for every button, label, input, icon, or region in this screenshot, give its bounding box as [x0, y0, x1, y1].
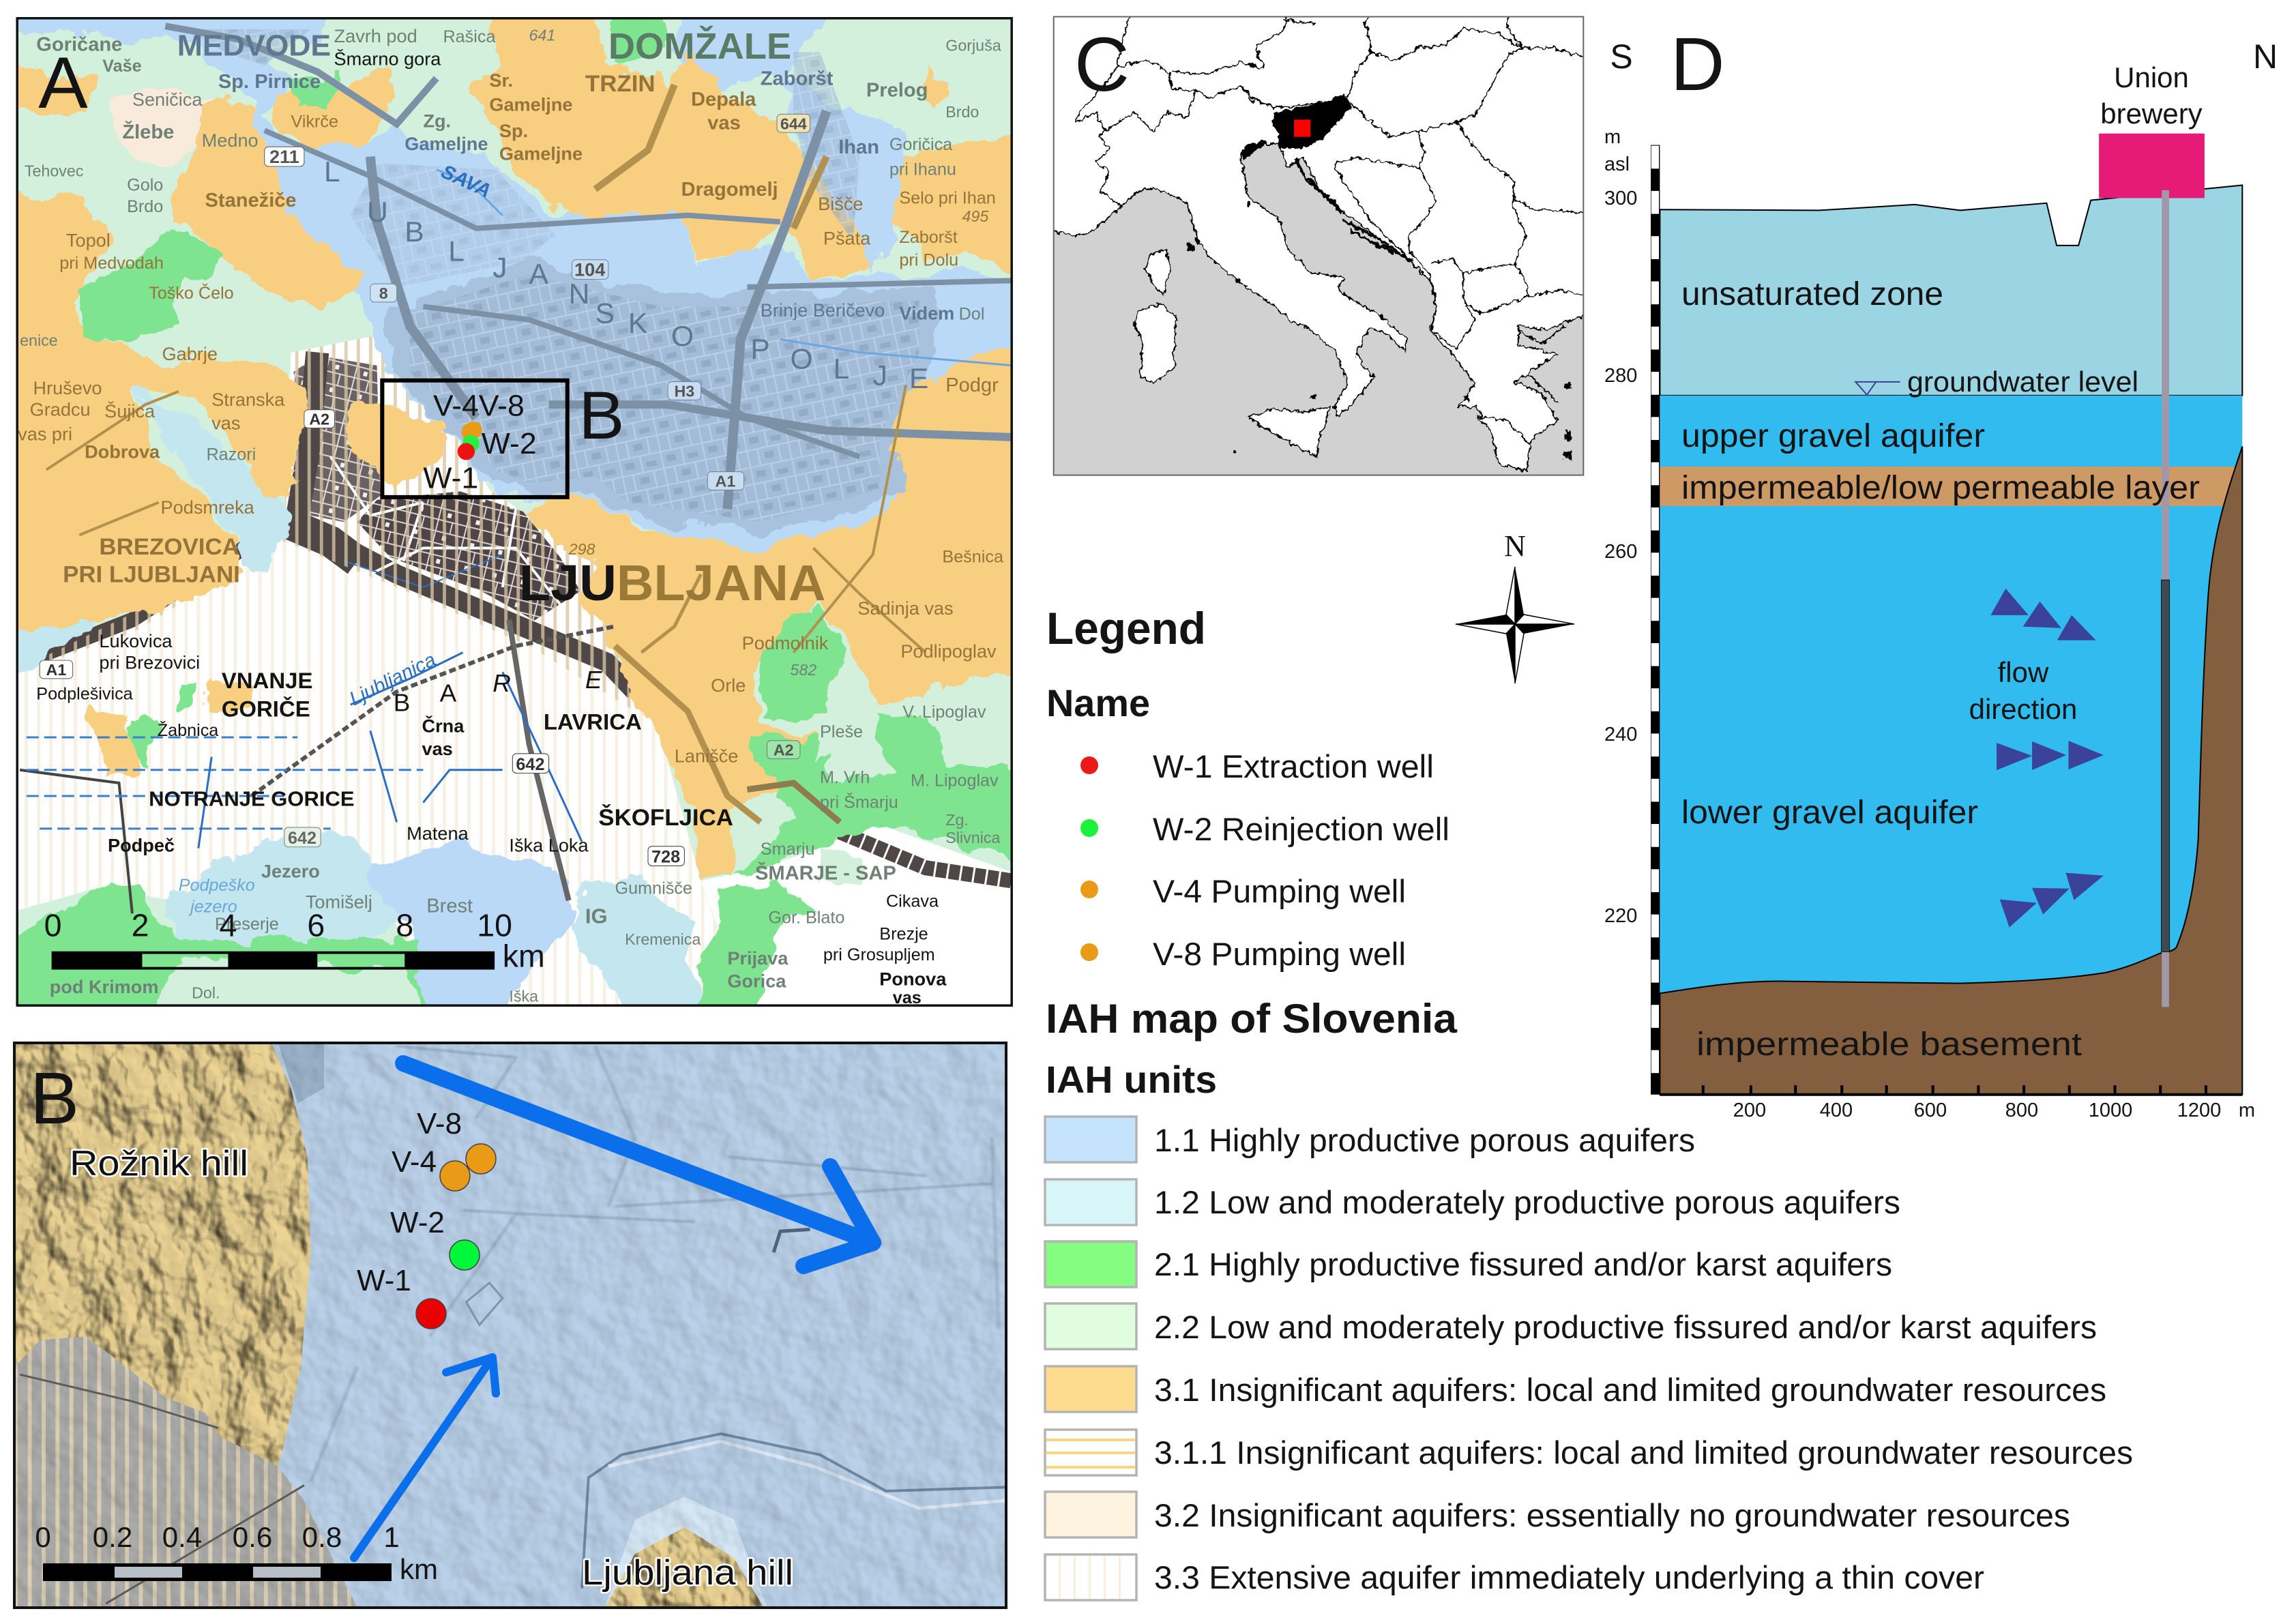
wells on map B: [416, 1144, 496, 1329]
panel A: IAH map: Šmarno gora: [334, 48, 441, 70]
well labels B: V-8: [417, 1107, 462, 1140]
scale bar A: 10: [477, 908, 512, 943]
panel A: IAH map: Lanišče: [675, 746, 738, 766]
panel A: IAH map: 644: [780, 115, 807, 132]
hill labels: Rožnik hill: [70, 1144, 248, 1183]
panel A: IAH map: Zg.: [945, 811, 969, 829]
scale bar B: 1: [383, 1521, 400, 1553]
panel A: IAH map: 642: [288, 829, 317, 848]
panel A: IAH map: pri Šmarju: [820, 792, 898, 812]
legend name heading: Name: [1046, 681, 1150, 724]
panel A: IAH map: O: [671, 320, 694, 352]
panel A: IAH map: Prijava: [727, 948, 789, 969]
panel A: IAH map: TRZIN: [585, 71, 656, 97]
panel A: IAH map: pri Brezovici: [99, 653, 200, 673]
panel A: IAH map: 495: [962, 207, 988, 225]
panel A: IAH map: Slivnica: [945, 829, 1001, 846]
well labels B: V-4: [392, 1145, 437, 1179]
south and north marks: [1610, 38, 2278, 76]
panel A: IAH map: B: [394, 689, 410, 717]
panel A: IAH map: Pleše: [820, 722, 863, 741]
panel A: IAH map: ŠKOFLJICA: [598, 803, 733, 831]
legend heading: Legend: [1046, 603, 1206, 653]
panel A: IAH map: pod Krimom: [50, 977, 158, 997]
panel A: IAH map: PRI LJUBLJANI: [63, 561, 240, 587]
panel A: IAH map: Sr.: [489, 70, 513, 91]
elevation labels: 260: [1604, 541, 1637, 563]
flow direction label: [1969, 656, 2077, 725]
panel A: IAH map: P: [750, 333, 770, 365]
scale bar B: 0.4: [162, 1521, 202, 1553]
panel A: IAH map: Gorica: [727, 971, 786, 991]
distance labels: 400: [1820, 1100, 1853, 1121]
panel A: IAH map: BREZOVICA: [99, 534, 239, 560]
panel A: IAH map: Gabrje: [162, 344, 218, 364]
panel A: IAH map: Vaše: [102, 57, 142, 76]
panel A: IAH map: Golo: [127, 175, 163, 194]
legend: IAH units: 1.2 Low and moderately productive porous aquifers: [1154, 1184, 1900, 1220]
flow direction label: flow: [1998, 656, 2049, 688]
panel A: IAH map: Gor. Blato: [768, 909, 844, 928]
legend: IAH units: 3.1 Insignificant aquifers: local and limited groundwater resources: [1154, 1372, 2106, 1408]
south and north marks: S: [1610, 38, 1633, 76]
elevation labels: asl: [1604, 153, 1630, 175]
panel A: IAH map: Podplešivica: [36, 685, 133, 703]
scale bar B: [35, 1521, 438, 1585]
panel B letter: B: [30, 1057, 79, 1139]
map roads: [20, 26, 1012, 913]
legend: wells: [1080, 748, 1449, 972]
legend: wells: W-2 Reinjection well: [1153, 811, 1449, 847]
legend: IAH units: 3.1.1 Insignificant aquifers: local and limited groundwater resources: [1154, 1434, 2133, 1471]
panel A: IAH map: E: [909, 362, 928, 394]
panel A: IAH map: A1: [716, 473, 735, 490]
legend: IAH units: 2.2 Low and moderately productive fissured and/or karst aquifers: [1154, 1309, 2097, 1345]
panel A: IAH map: Gumnišče: [615, 879, 692, 898]
scale bar B: 0.6: [233, 1521, 272, 1553]
panel A: IAH map: 582: [790, 661, 816, 679]
panel A: IAH map: A2: [309, 411, 329, 428]
panel A: IAH map: Sp.: [499, 121, 528, 141]
panel A: IAH map: Goričane: [36, 34, 122, 56]
panel A: IAH map: Iška: [509, 988, 538, 1005]
flow direction label: direction: [1969, 693, 2077, 725]
distance labels: 1200: [2177, 1100, 2221, 1121]
IAH units heading: IAH units: [1046, 1058, 1217, 1101]
well pipe: [2162, 190, 2169, 1007]
panel A: IAH map: Gameljne: [489, 95, 573, 115]
panel D: cross section: [1604, 23, 2278, 1121]
legend: IAH units: [1045, 1117, 2133, 1600]
impermeable basement: [1660, 447, 2242, 1095]
elevation labels: 280: [1604, 365, 1637, 387]
panel A: IAH map: K: [628, 307, 647, 339]
scale bar B: 0: [35, 1521, 51, 1553]
panel A: IAH map: [0, 7, 1018, 1018]
panel A: IAH map: SAVA: [438, 161, 495, 202]
scale bar A: 4: [219, 908, 237, 943]
panel A: IAH map: LAVRICA: [544, 709, 642, 734]
panel A: IAH map: Podpeč: [108, 836, 175, 855]
panel B frame: [14, 1043, 1006, 1608]
panel A: IAH map: Brdo: [945, 103, 979, 121]
distance labels: 600: [1914, 1100, 1947, 1121]
panel A: IAH map: Žlebe: [122, 120, 174, 143]
elevation scale: [1651, 145, 1660, 1095]
panel A: IAH map: Cikava: [886, 892, 939, 911]
panel A: IAH map: vas pri: [18, 424, 72, 445]
compass rose: [1456, 529, 1574, 683]
panel A: IAH map: 728: [651, 848, 680, 867]
panel A: IAH map: J: [873, 359, 887, 391]
panel A: IAH map: LJUBLJANA: [519, 555, 825, 611]
legend: wells: W-1 Extraction well: [1153, 748, 1434, 784]
panel A: IAH map: Zavrh pod: [334, 26, 417, 46]
panel A: IAH map: 641: [529, 26, 555, 44]
panel C letter: C: [1074, 22, 1130, 107]
panel A: IAH map: L: [324, 156, 340, 188]
south and north marks: N: [2253, 38, 2278, 76]
Union brewery label: Union: [2114, 61, 2189, 93]
panel A: IAH map: MEDVODE: [177, 29, 331, 62]
panel A: IAH map: Podpeško: [179, 876, 255, 895]
well labels B: [357, 1107, 462, 1297]
distance labels: [1733, 1100, 2255, 1121]
scale bar A: km: [503, 939, 545, 974]
scale bar A: 2: [132, 908, 149, 943]
panel A: IAH map: Dragomelj: [681, 179, 778, 201]
panel C: location map: [1044, 5, 1593, 475]
panel A frame: [17, 18, 1012, 1005]
legend: wells: V-4 Pumping well: [1153, 873, 1406, 909]
panel A: IAH map: Podmolnik: [742, 633, 829, 653]
panel A: IAH map: Videm: [899, 304, 954, 324]
panel A: IAH map: Podsmreka: [161, 497, 254, 518]
panel A: IAH map: Gradcu: [30, 400, 91, 419]
distance labels: 1000: [2089, 1100, 2132, 1121]
upper gravel aquifer: [1660, 396, 2242, 467]
panel A: IAH map: U: [367, 196, 388, 228]
panel A: IAH map: pri Dolu: [899, 250, 958, 269]
layer labels: upper gravel aquifer: [1681, 418, 1985, 454]
panel A: IAH map: Podgr: [945, 374, 999, 396]
panel A: IAH map: Rašica: [443, 27, 496, 46]
panel A: IAH map: Brezje: [879, 925, 928, 943]
panel A: IAH map: pri Ihanu: [889, 160, 956, 179]
panel A: IAH map: Razori: [206, 445, 256, 464]
panel A: IAH map: Dol: [959, 305, 984, 324]
scale bar A: [44, 908, 545, 974]
panel A: IAH map: Preserje: [215, 915, 279, 934]
panel A: IAH map: 211: [269, 147, 299, 167]
panel A: IAH map: pri Grosupljem: [823, 945, 935, 964]
panel A: IAH map: Goričica: [889, 135, 952, 154]
panel A: IAH map: Medno: [202, 130, 259, 151]
panel A: IAH map: Zg.: [423, 111, 451, 131]
inset box B: [382, 377, 624, 497]
well screen: [2162, 580, 2170, 952]
layer labels: impermeable/low permeable layer: [1681, 470, 2200, 506]
panel A: IAH map: R: [492, 669, 511, 697]
urban texture: [185, 29, 919, 522]
elevation labels: 240: [1604, 724, 1637, 746]
panel A: IAH map: Podlipoglav: [900, 641, 997, 662]
panel A: IAH map: B: [404, 216, 424, 248]
panel A: IAH map: Sadinja vas: [857, 598, 954, 619]
distance labels: 800: [2005, 1100, 2038, 1121]
layer labels: impermeable basement: [1696, 1027, 2082, 1063]
panel A letter: A: [38, 41, 88, 123]
scale bar B: 0.8: [302, 1521, 342, 1553]
panel A: IAH map: Zaboršt: [899, 228, 958, 247]
panel A: IAH map: M. Vrh: [820, 768, 870, 787]
panel A: IAH map: Dobrova: [85, 442, 160, 462]
panel A: IAH map: H3: [674, 383, 694, 400]
scale bar A: 0: [44, 908, 61, 943]
legend: IAH units: 3.3 Extensive aquifer immediately underlying a thin cover: [1154, 1559, 1984, 1595]
panel A: IAH map: IG: [585, 904, 608, 928]
layer labels: lower gravel aquifer: [1681, 795, 1978, 831]
panel A: IAH map: Sp. Pirnice: [218, 71, 321, 93]
panel A: IAH map: A1: [46, 661, 66, 679]
panel A: IAH map: Topol: [66, 231, 111, 251]
panel A: IAH map: Bišče: [818, 194, 864, 214]
panel A: IAH map: Orle: [711, 675, 746, 696]
groundwater level symbol: [1855, 382, 1900, 395]
layer labels: unsaturated zone: [1681, 276, 1943, 312]
panel A: IAH map: Matena: [407, 823, 469, 844]
Union brewery label: [2100, 61, 2203, 130]
panel A: IAH map: Selo pri Ihan: [899, 189, 996, 207]
panel A: IAH map: Ponova: [879, 969, 947, 989]
panel A: IAH map: Ljubljanica: [346, 649, 439, 710]
IAH map heading: IAH map of Slovenia: [1046, 996, 1458, 1042]
panel A: IAH map: Brest: [426, 895, 473, 917]
groundwater level label: groundwater level: [1907, 366, 2138, 398]
unsaturated zone: [1660, 185, 2242, 396]
compass rose: N: [1504, 529, 1526, 563]
elevation labels: 300: [1604, 188, 1637, 209]
panel A: IAH map: A2: [774, 741, 794, 759]
scale bar B: km: [400, 1553, 438, 1585]
panel A: IAH map: Vikrče: [291, 113, 338, 131]
panel A: IAH map: Jezero: [261, 861, 320, 882]
layer labels: [1681, 276, 2200, 1063]
well labels B: W-1: [357, 1264, 411, 1297]
panel A: IAH map: Hruševo: [33, 378, 102, 398]
panel A: IAH map: Smarju: [761, 840, 815, 859]
panel A: IAH map: Brdo: [127, 197, 163, 216]
hill labels: [70, 1144, 793, 1593]
panel A: IAH map: vas: [211, 413, 240, 433]
panel A: IAH map: Stranska: [211, 389, 284, 410]
panel A: IAH map: Seničica: [132, 89, 202, 110]
panel A: IAH map: Brinje Beričevo: [761, 300, 885, 321]
panel A: IAH map: Šujica: [104, 400, 155, 422]
panel A: IAH map: DOMŽALE: [608, 25, 791, 67]
legend: wells: V-8 Pumping well: [1153, 936, 1406, 972]
panel A: IAH map: Lukovica: [99, 631, 173, 651]
legend: IAH units: 1.1 Highly productive porous aquifers: [1154, 1122, 1695, 1158]
panel A: IAH map: Stanežiče: [205, 190, 297, 211]
panel A: IAH map: 642: [516, 755, 544, 774]
panel A: IAH map: Toško Čelo: [149, 283, 234, 303]
wells on map A: V-4V-8: [433, 389, 525, 422]
panel A: IAH map: E: [585, 666, 602, 694]
panel A: IAH map: 298: [568, 540, 595, 558]
flow arrow: small: [354, 1357, 496, 1558]
elevation labels: 220: [1604, 905, 1637, 927]
city blocks: [7, 353, 1012, 881]
panel A: IAH map: Gorjuša: [945, 37, 1001, 55]
panel A: IAH map: A: [529, 258, 549, 290]
panel A: IAH map: 104: [574, 260, 605, 280]
panel A: IAH map: M. Lipoglav: [911, 771, 999, 791]
flow arrow: large: [403, 1063, 873, 1266]
panel B: hillshade map: [14, 1042, 1006, 1608]
panel A: IAH map: Bešnica: [942, 548, 1003, 567]
panel A: IAH map: Tehovec: [25, 162, 84, 179]
panel A: IAH map: J: [492, 252, 507, 283]
panel A: IAH map: N: [569, 278, 589, 310]
distance labels: 200: [1733, 1100, 1766, 1121]
panel A: IAH map: Žabnica: [158, 720, 218, 740]
wells on map A: [423, 389, 537, 495]
panel D letter: D: [1671, 23, 1724, 106]
panel A: IAH map: A: [440, 679, 457, 707]
hill labels: Ljubljana hill: [582, 1553, 793, 1593]
scale bar B: 0.2: [93, 1521, 132, 1553]
panel A: IAH map: NOTRANJE GORICE: [149, 787, 355, 810]
distance labels: m: [2239, 1100, 2255, 1121]
panel A: IAH map: ŠMARJE - SAP: [755, 861, 896, 884]
flow arrows: [1990, 589, 2104, 928]
panel A: IAH map: Zaboršt: [761, 68, 834, 89]
panel A: IAH map: pri Medvodah: [59, 254, 164, 273]
well labels B: W-2: [390, 1206, 445, 1239]
panel A: IAH map: L: [833, 353, 849, 385]
panel A: IAH map: VNANJE: [222, 668, 312, 693]
panel A: IAH map: Depala: [691, 89, 756, 110]
impermeable layer: [1660, 467, 2238, 507]
legend: IAH units: 3.2 Insignificant aquifers: essentially no groundwater resources: [1154, 1497, 2070, 1533]
panel A: IAH map: enice: [20, 331, 58, 349]
panel A: IAH map: Črna: [422, 714, 465, 736]
panel A: IAH map: jezero: [188, 897, 237, 916]
panel A: IAH map: Tomišelj: [306, 892, 372, 913]
elevation labels: [1604, 126, 1637, 927]
distance ticks: [1660, 1085, 2242, 1095]
panel A: IAH map: L: [448, 235, 465, 267]
inset box B: B: [578, 377, 624, 454]
elevation labels: m: [1604, 126, 1621, 148]
Union brewery label: brewery: [2100, 98, 2203, 130]
legend: IAH units: 2.1 Highly productive fissured and/or karst aquifers: [1154, 1246, 1892, 1282]
panel A: IAH map: Iška Loka: [509, 836, 589, 855]
panel A: IAH map: 8: [379, 284, 388, 302]
panel A: IAH map: V. Lipoglav: [902, 703, 986, 722]
wells on map A: W-1: [423, 462, 478, 495]
panel A: IAH map: Kremenica: [625, 930, 701, 948]
panel A: IAH map: Gameljne: [499, 144, 583, 164]
panel A: IAH map: Dol.: [192, 984, 220, 1002]
panel A: IAH map: Ihan: [838, 136, 879, 158]
panel A: IAH map: GORIČE: [222, 696, 310, 721]
scale bar A: 8: [396, 908, 413, 943]
panel A: IAH map: vas: [893, 988, 922, 1007]
panel A: IAH map: Pšata: [823, 228, 870, 249]
panel A: IAH map: Gameljne: [404, 134, 488, 154]
panel A: IAH map: Prelog: [866, 80, 928, 102]
wells on map A: W-2: [482, 427, 537, 460]
panel A: IAH map: S: [595, 297, 615, 329]
brewery: [2099, 134, 2205, 198]
panel A: IAH map: vas: [707, 113, 741, 134]
lower gravel aquifer: [1660, 506, 2228, 994]
panel A: IAH map: vas: [422, 739, 453, 759]
panel A: IAH map: O: [790, 343, 813, 374]
scale bar A: 6: [307, 908, 325, 943]
